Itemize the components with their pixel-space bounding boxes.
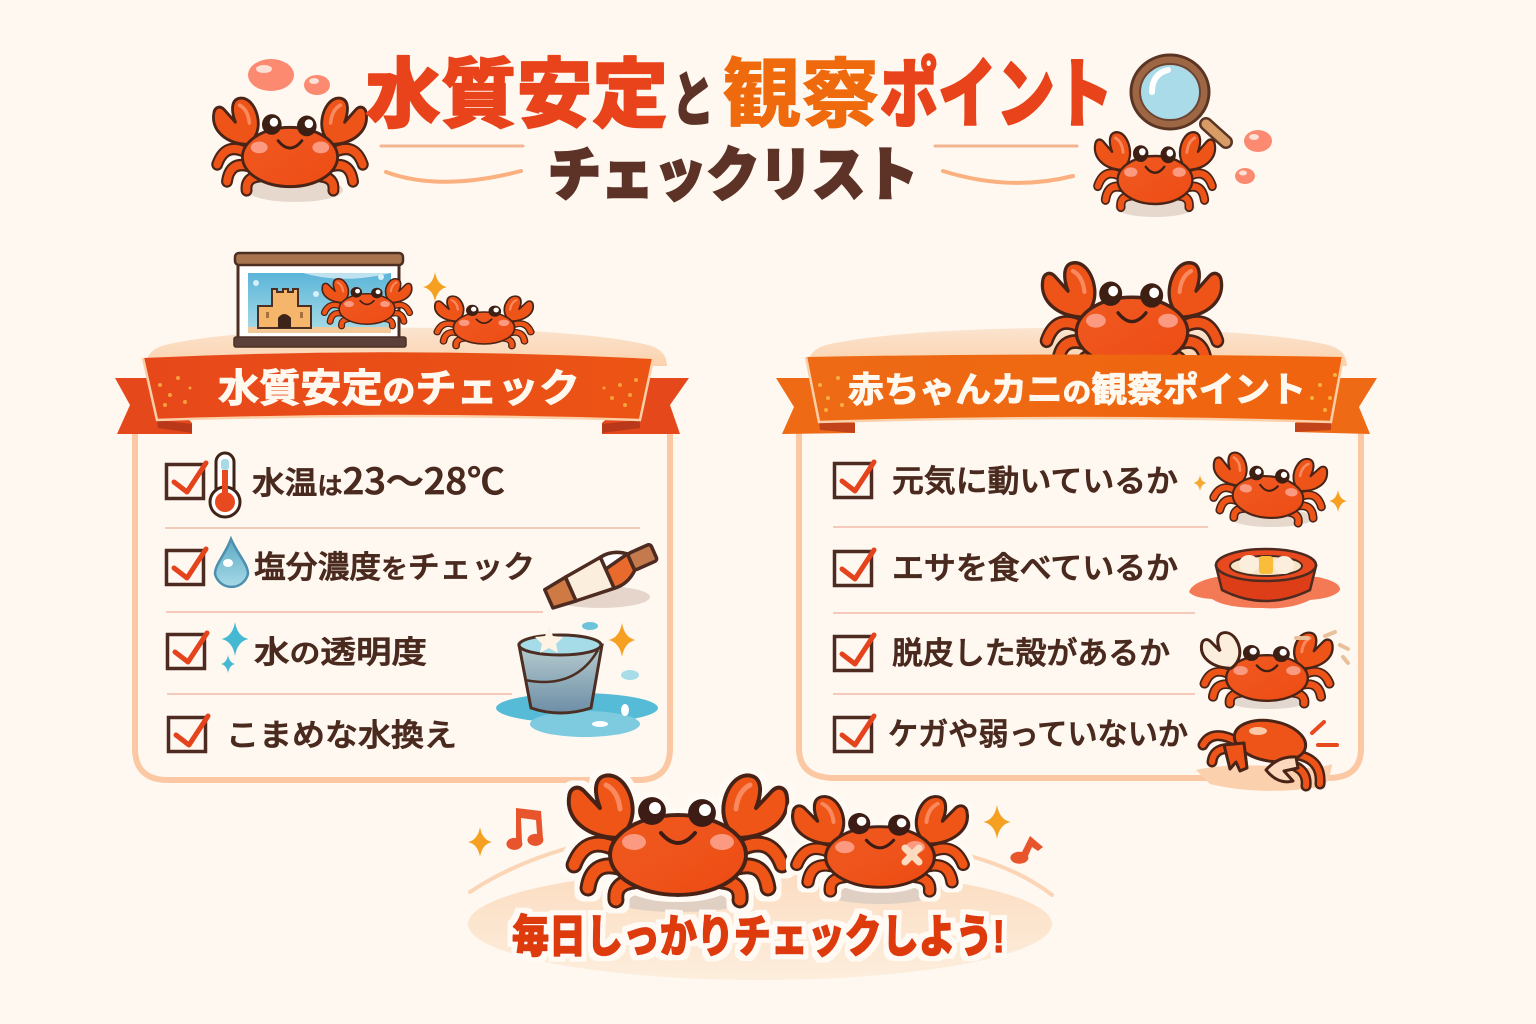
item: active: 元気に動いているか (892, 464, 1178, 499)
icon: water drop (215, 539, 248, 587)
ribbon (115, 352, 689, 434)
icon: hydrometer bottle (542, 536, 661, 615)
icon: thermometer (210, 453, 240, 517)
item: molted shell: 脱皮した殻があるか (892, 636, 1170, 671)
panel heading: 水質安定 のチェック (218, 368, 580, 411)
big crab (569, 775, 787, 912)
sparkle (423, 272, 447, 302)
slogan: 毎日しっかりチェックしよう! (512, 911, 1005, 962)
bubbles right (1235, 130, 1272, 184)
item: water change: こまめな水換え (226, 718, 457, 753)
title line 1: ポイント (880, 53, 1113, 138)
item: clarity: 水の透明度 (254, 635, 427, 670)
title line 1 (365, 53, 1113, 138)
panel arch (808, 328, 1347, 366)
panel frame (135, 420, 670, 780)
icon: aquarium (234, 253, 406, 347)
bottom banner (468, 775, 1052, 980)
panel: water quality (115, 253, 689, 780)
item: water temperature: 水温は23〜28℃ (252, 453, 505, 505)
crab with molted shell (1201, 632, 1348, 709)
crab in aquarium (322, 279, 412, 326)
ribbon (776, 354, 1377, 434)
bubbles left (248, 59, 330, 95)
icon: teal sparkles (221, 622, 249, 673)
header (213, 53, 1272, 217)
sparkles (468, 805, 1011, 857)
icon: music notes (506, 808, 1043, 864)
icon: water bucket (496, 622, 658, 737)
item: water temperature (166, 453, 505, 517)
panel: baby crab observation (776, 263, 1377, 791)
title ornaments (381, 146, 1077, 183)
crab top right (1095, 132, 1215, 217)
crab injured (1196, 715, 1337, 791)
title line 2: チェックリスト (548, 143, 918, 208)
item: clarity (168, 622, 427, 673)
title line 1: と (672, 67, 714, 134)
small crab with bandage (793, 796, 967, 904)
item: eating: エサを食べているか (892, 551, 1178, 586)
crab active (1194, 451, 1347, 527)
item: injured: ケガや弱っていないか (888, 717, 1188, 752)
sand oval (468, 868, 1052, 980)
panel heading: 赤ちゃんカニの観察ポイント (848, 371, 1306, 410)
crab on banner (1042, 263, 1222, 371)
title line 1: 観察 (722, 53, 880, 138)
title line 1: 水質安定 (365, 53, 668, 138)
panel arch (146, 328, 667, 366)
panel frame (799, 420, 1361, 778)
decorative arcs (470, 848, 1052, 895)
icon: magnifying glass (1131, 55, 1226, 142)
crab top left (213, 98, 367, 202)
item: salinity: 塩分濃度をチェック (254, 550, 535, 585)
item: salinity (166, 539, 535, 587)
crab beside aquarium (435, 296, 533, 346)
icon: food bowl (1189, 549, 1340, 608)
